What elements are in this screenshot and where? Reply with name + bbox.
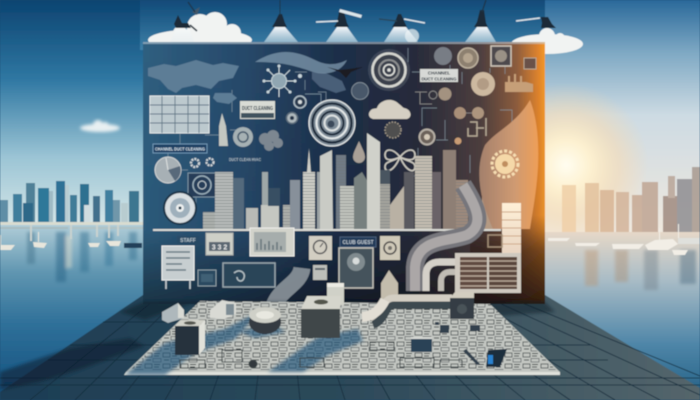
sheet heavy marks (180, 342, 462, 368)
vent unit (455, 253, 521, 293)
flower icon (385, 150, 415, 171)
label: channel duct cleaning: CHANNEL (428, 70, 450, 76)
tan circle icons (415, 88, 484, 119)
panel: duct cleaning board (143, 42, 545, 306)
tower (219, 113, 228, 146)
column duct (502, 203, 521, 253)
readout panel (206, 233, 233, 255)
target upper (368, 49, 410, 91)
sun glow (484, 83, 648, 247)
water right (545, 232, 700, 392)
small gauge icons (286, 94, 321, 124)
label: club guest (340, 237, 376, 247)
cluster icon (259, 130, 283, 151)
shelf (153, 229, 501, 231)
second duct elbow (426, 262, 456, 291)
dark box on sheet (411, 337, 432, 352)
disc icon (164, 192, 196, 224)
skyline left (0, 181, 139, 224)
round fan unit (249, 307, 281, 334)
dotted circuit icons (385, 118, 486, 144)
pie icon (155, 157, 181, 183)
background: sky left (0, 0, 150, 225)
reflections left (27, 232, 137, 282)
floor (0, 295, 700, 400)
label: channel duct cleaning blue (153, 144, 207, 153)
text: staff (177, 236, 199, 244)
fixture 1 (174, 2, 200, 31)
spotlight cone 2 (264, 27, 298, 42)
circuit connector lines (168, 48, 512, 216)
horizontal duct (362, 298, 452, 322)
skyline right (562, 167, 700, 235)
gauge small right (488, 235, 502, 247)
control cabinet (162, 246, 194, 289)
blueprint sheet (0, 301, 560, 390)
flame duct shape (479, 100, 538, 229)
grey box far left (162, 303, 184, 323)
text: staff: STAFF (180, 238, 196, 244)
label: channel duct cleaning: DUCT CLEANING (422, 76, 457, 82)
tall box (327, 283, 344, 305)
text: duct clean: DUCT CLEAN HVAC (229, 157, 261, 162)
factory icon (505, 74, 533, 92)
dark screen (223, 263, 275, 287)
water drop (353, 141, 365, 163)
main flexible duct (415, 185, 477, 291)
small control box (313, 265, 327, 280)
target large (309, 100, 355, 146)
spotlight cone 4 (384, 27, 418, 42)
fixture 2 (272, 0, 287, 27)
central cube (301, 296, 341, 338)
gauge panel left (309, 236, 332, 260)
label: channel duct cleaning blue: CHANNEL DUCT CLEANING (155, 147, 205, 153)
table panel (150, 96, 209, 133)
bird silhouette (327, 67, 363, 78)
reflections right (585, 250, 696, 290)
bridge left (0, 222, 143, 241)
spotlight cone 5 (465, 27, 496, 42)
fixture 3 (316, 9, 362, 27)
background: sky top (140, 0, 555, 50)
fixture 6 (516, 17, 556, 28)
target square (188, 173, 216, 197)
framed poster (339, 248, 373, 288)
blue shadow patches (125, 311, 363, 375)
readout panel: 3 3 2 (212, 244, 227, 252)
cloud icon (369, 100, 411, 119)
label: duct cleaning (240, 101, 275, 119)
boats left (0, 232, 142, 250)
label: club guest: CLUB GUEST (342, 240, 374, 246)
top right icon cluster (434, 46, 536, 96)
sphere (352, 82, 368, 100)
light fixtures (170, 0, 556, 42)
cube right (450, 292, 474, 319)
data wave band (255, 52, 347, 74)
fixture 5 (474, 0, 488, 27)
floor units (162, 283, 507, 368)
water left (0, 222, 145, 392)
spotlight cone 1 (170, 27, 194, 42)
label: channel duct cleaning (420, 69, 458, 82)
spotlight cone 3 (326, 27, 358, 42)
small cloud left (80, 120, 120, 132)
grey exhaust duct (274, 268, 302, 306)
wall shadow on floor (120, 302, 555, 320)
world map (148, 60, 346, 104)
label: duct cleaning: DUCT CLEANING (242, 106, 273, 112)
fixture 4 (379, 14, 425, 27)
small screen (198, 270, 216, 286)
monitor (250, 228, 294, 256)
gear sunburst (492, 151, 518, 177)
cube left (175, 320, 205, 355)
clouds behind panel (148, 12, 583, 54)
small parts (435, 322, 480, 365)
blue tool (486, 349, 507, 367)
virus icon (262, 64, 302, 97)
background: sky right (545, 0, 700, 240)
house vent (381, 270, 398, 300)
boats right (548, 224, 700, 255)
skyline panel (203, 133, 495, 229)
gauge panel right (380, 236, 400, 260)
ring icon (233, 127, 253, 147)
white block (210, 300, 236, 319)
gear icons (191, 158, 214, 167)
